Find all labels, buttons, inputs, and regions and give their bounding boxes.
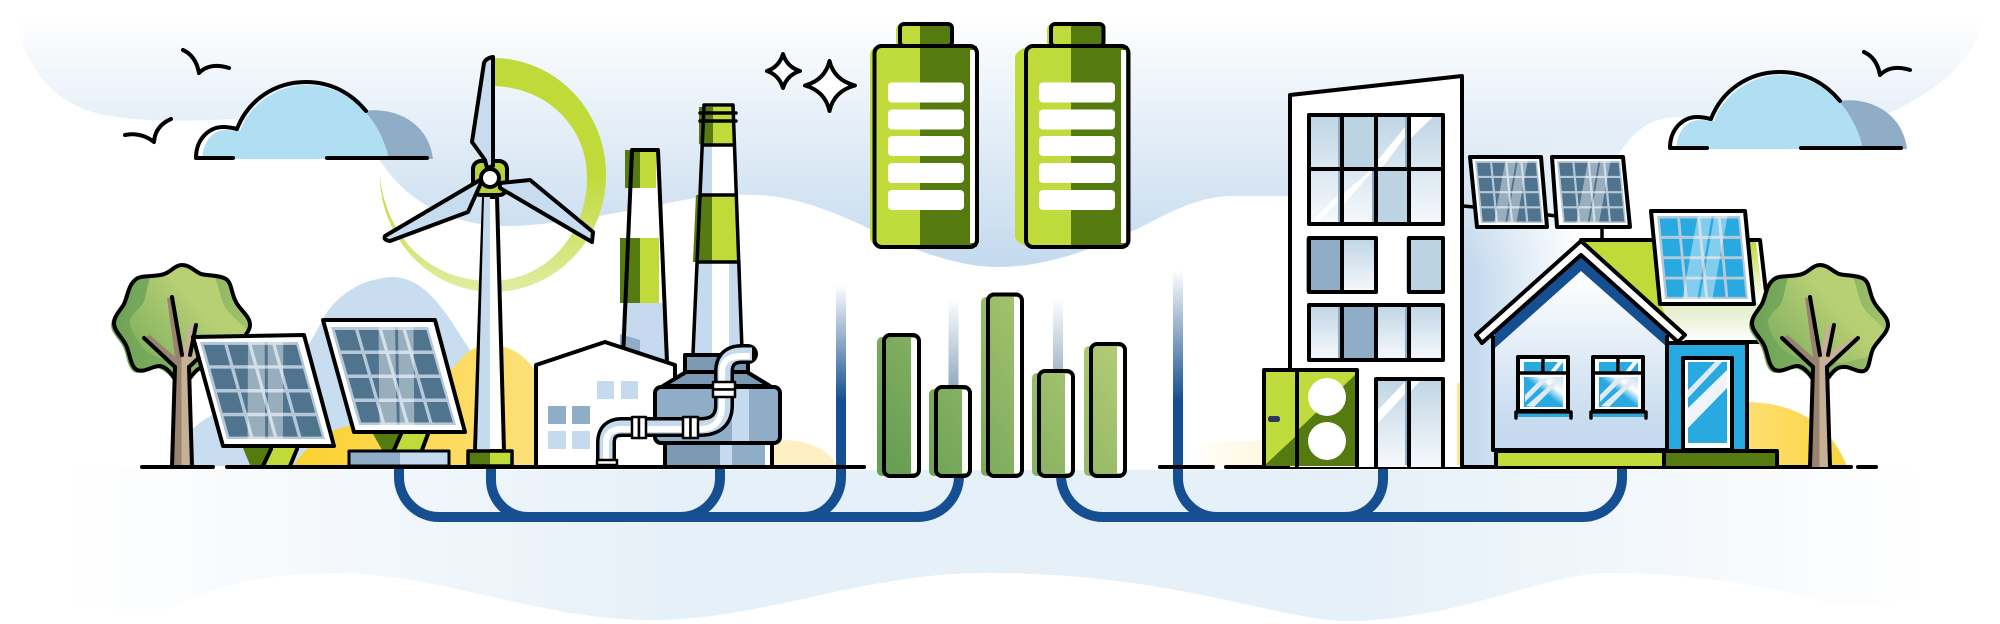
bar 2 — [929, 387, 970, 476]
bar 3 — [981, 294, 1022, 476]
underground cables — [399, 398, 1622, 517]
nacelle — [473, 161, 507, 195]
panel stand — [243, 448, 297, 466]
big rooftop solar panel — [1651, 211, 1754, 304]
stand and base — [349, 434, 449, 466]
windows row 4 — [1376, 379, 1443, 466]
cap — [1047, 24, 1104, 46]
tower — [475, 197, 504, 451]
ground fill — [60, 470, 1930, 621]
chimney 2 — [693, 105, 742, 354]
cloud left — [196, 82, 433, 159]
sparkle small — [767, 54, 800, 88]
white fade behind rooftop panels — [1484, 166, 1614, 465]
windows row 2 — [1306, 238, 1443, 292]
background sky — [20, 20, 1980, 467]
blue roof strip — [1495, 254, 1667, 348]
cap — [896, 24, 952, 46]
annex wall — [1667, 343, 1747, 450]
yellow hill right — [1745, 402, 1847, 466]
house plinth — [1496, 451, 1777, 466]
bar 1 — [877, 335, 919, 476]
tree right — [1749, 265, 1888, 467]
blades — [385, 57, 593, 242]
pale hill near building — [1190, 440, 1270, 466]
house — [1476, 211, 1777, 466]
hub — [481, 169, 499, 187]
battery 1 — [870, 24, 977, 247]
background hills left — [192, 277, 536, 466]
factory windows — [548, 381, 638, 449]
battery cells — [1039, 82, 1115, 210]
heat pump unit — [1264, 370, 1357, 466]
house door — [1683, 358, 1732, 450]
rooftop solar panel A — [1463, 157, 1557, 227]
ground line — [142, 465, 1876, 469]
pipework — [597, 344, 758, 465]
house window 1 — [1516, 357, 1571, 418]
fading risers — [841, 270, 1178, 400]
storage bars — [877, 294, 1125, 476]
bar 4 — [1032, 371, 1073, 476]
factory building — [536, 342, 675, 466]
apartment building — [1290, 76, 1462, 467]
bird left — [125, 119, 171, 142]
windows row 3 — [1309, 305, 1443, 360]
white roof edge — [1476, 241, 1685, 343]
bird right — [1864, 52, 1910, 75]
cloud right — [1670, 72, 1907, 149]
solar panel 2 — [323, 320, 465, 466]
windows row 1 — [1309, 115, 1443, 224]
chimney 1 — [620, 150, 667, 362]
wind turbine — [385, 57, 593, 466]
house front wall — [1493, 258, 1667, 450]
rooftop solar panel B — [1552, 157, 1630, 241]
pale hill near factory — [772, 440, 837, 466]
bar 5 — [1084, 344, 1125, 476]
back roof — [1581, 240, 1766, 342]
battery cells — [888, 82, 964, 210]
battery 2 — [1015, 24, 1128, 247]
tower base — [468, 451, 512, 466]
bird top left — [183, 50, 229, 73]
house window 2 — [1591, 357, 1646, 418]
sparkle large — [805, 61, 855, 111]
tree left — [111, 265, 250, 467]
storage tank — [655, 355, 780, 466]
solar panel 1 — [193, 335, 334, 466]
green power ring — [380, 58, 606, 292]
